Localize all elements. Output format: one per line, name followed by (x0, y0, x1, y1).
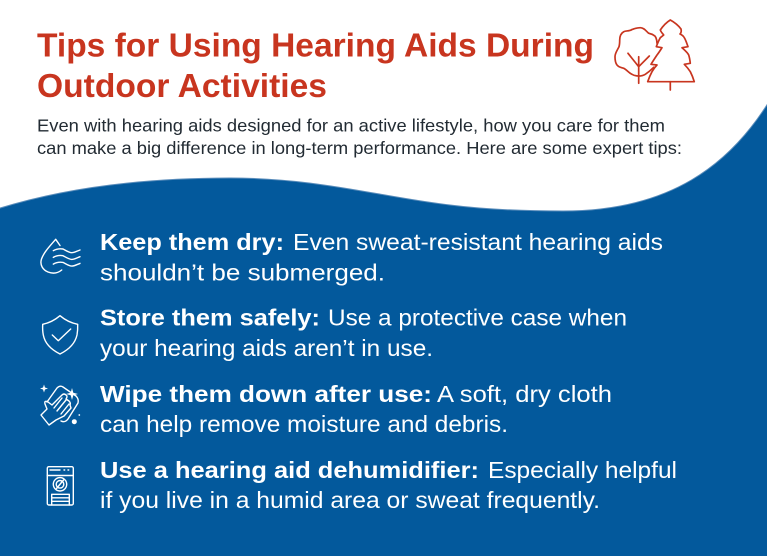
tip text: Especially helpful (488, 457, 677, 483)
title: Tips for Using Hearing Aids During (37, 26, 594, 64)
icon: dehumidifier appliance (47, 467, 73, 505)
title: Outdoor Activities (37, 67, 327, 104)
intro text: can make a big difference in long-term performance. Here are some expert tips: (37, 138, 682, 158)
tip text: your hearing aids aren’t in use. (100, 335, 433, 361)
icon: trees (615, 20, 694, 90)
tip text: Store them safely: (100, 304, 320, 330)
tip: wipe them down (40, 381, 612, 437)
tip text (100, 457, 677, 513)
intro text: Even with hearing aids designed for an active lifestyle, how you care for them (37, 116, 665, 136)
icon: sparkles and dots (40, 384, 80, 424)
icon: shield with check (43, 316, 78, 354)
tip text: Even sweat-resistant hearing aids (293, 229, 663, 255)
tip: dehumidifier (47, 457, 677, 513)
tip text: Use a protective case when (328, 304, 627, 330)
tip text (100, 381, 612, 437)
tip text: can help remove moisture and debris. (100, 411, 508, 437)
tip text: shouldn’t be submerged. (100, 260, 385, 286)
tip text: Use a hearing aid dehumidifier: (100, 457, 479, 483)
tip: keep them dry (41, 229, 663, 286)
tip text: Keep them dry: (100, 229, 284, 255)
tip: store them safely (43, 304, 627, 361)
icon: hand wiping with cloth (41, 386, 78, 425)
tip text (100, 229, 663, 286)
tip text (100, 304, 627, 361)
intro text (37, 116, 682, 158)
tip text: Wipe them down after use: (100, 381, 432, 407)
tip text: if you live in a humid area or sweat frequently. (100, 487, 600, 513)
icon: water drop with wind (41, 239, 80, 273)
title (37, 26, 594, 104)
tip text: A soft, dry cloth (437, 381, 612, 407)
